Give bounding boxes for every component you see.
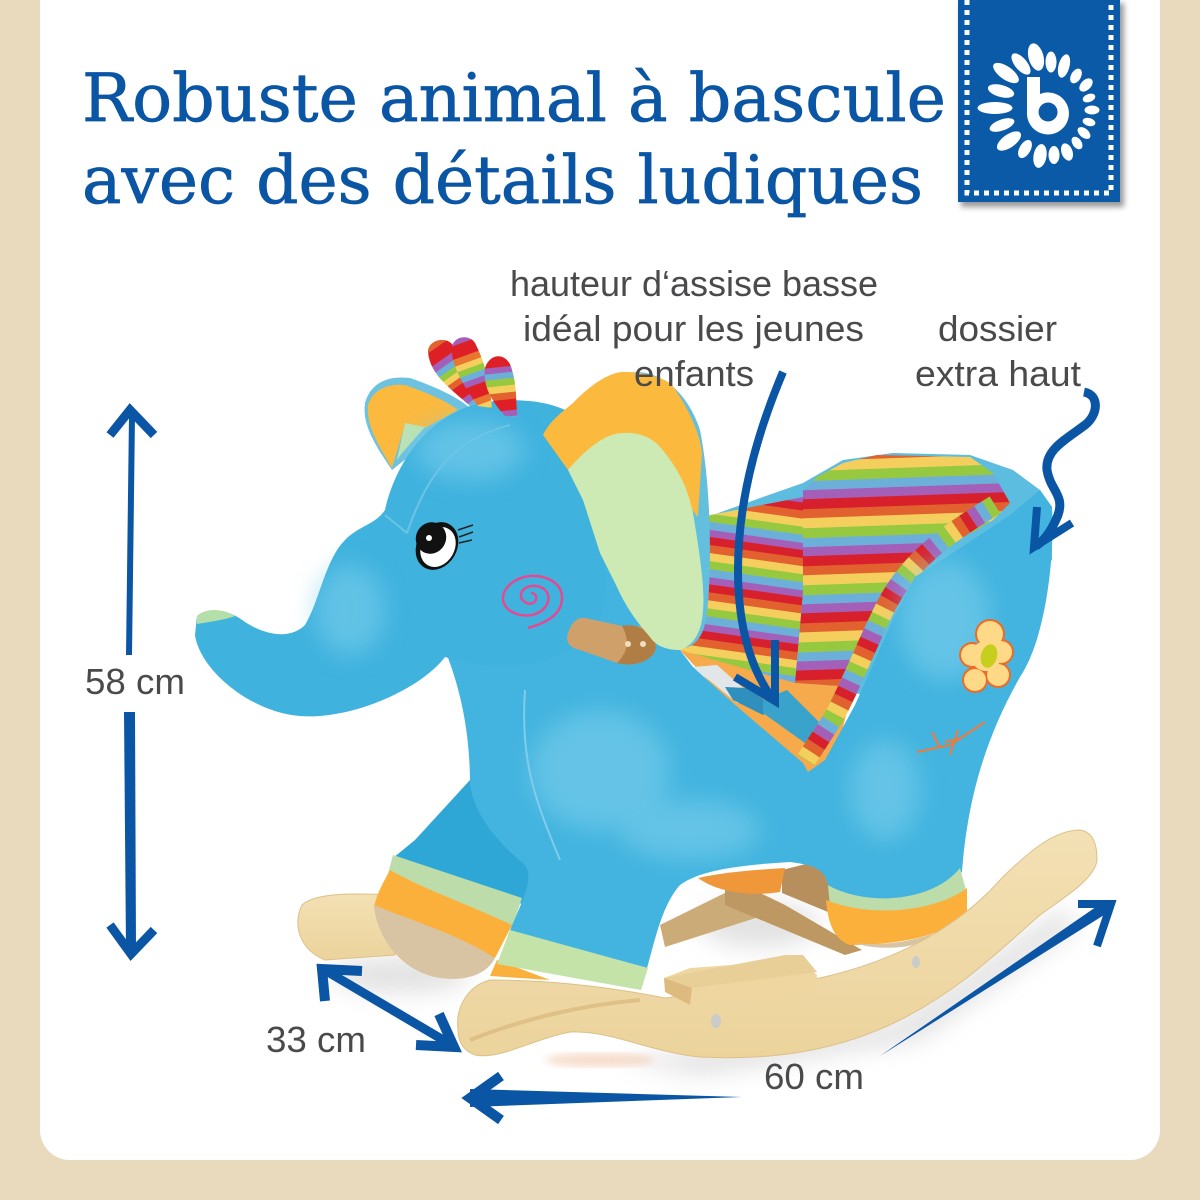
safety strap and buckle (693, 665, 827, 748)
arrow: height up (110, 410, 154, 655)
foot block (664, 955, 817, 1005)
seat back stripes left (678, 497, 803, 683)
logo: blue stitched label with flower (958, 0, 1124, 207)
rear leg cuff (826, 868, 967, 948)
label: low seat height: hauteur d‘assise basse (510, 263, 878, 304)
seat cushion (680, 650, 853, 780)
wooden cross bars (660, 860, 862, 955)
arrow: high backrest (1034, 392, 1095, 547)
seat back stripes right (795, 455, 1010, 687)
label: depth: 33 cm (266, 1019, 366, 1060)
title: Robuste animal à bascule (82, 60, 946, 137)
front rocker (458, 830, 1097, 1058)
arrow: length along rocker (880, 900, 1112, 1056)
arrow: height down (110, 712, 154, 954)
label: high backrest: extra haut (915, 353, 1081, 394)
label: low seat height (510, 263, 878, 394)
tufts (428, 337, 518, 417)
arrow: seat height (735, 372, 783, 701)
side flower (959, 619, 1014, 693)
label: low seat height: enfants (634, 353, 754, 394)
rocker screws (711, 956, 920, 1028)
label: high backrest: dossier (938, 308, 1057, 349)
cheek spiral (503, 576, 562, 628)
elephant head and trunk (195, 400, 606, 716)
far legs (374, 780, 560, 979)
seat back shell (685, 453, 1052, 700)
embroidered signature (917, 722, 985, 755)
rocking elephant product (195, 337, 1097, 1075)
eye (407, 514, 473, 578)
label: high backrest (915, 308, 1081, 394)
title (82, 60, 946, 219)
title: avec des détails ludiques (82, 142, 923, 219)
label: low seat height: idéal pour les jeunes (523, 308, 864, 349)
rear rocker end (298, 894, 395, 960)
rainbow seat edge (806, 505, 995, 760)
elephant body and side panel (445, 490, 1053, 972)
wooden handle (567, 618, 656, 665)
arrow: length bottom (470, 1076, 742, 1120)
front leg cuff (490, 930, 648, 990)
arrow: depth 33 cm (322, 969, 454, 1047)
label: length: 60 cm (764, 1056, 864, 1097)
floor shadow (330, 903, 1080, 1075)
near ear (543, 372, 710, 650)
far ear (365, 377, 470, 470)
label: height: 58 cm (85, 661, 185, 702)
